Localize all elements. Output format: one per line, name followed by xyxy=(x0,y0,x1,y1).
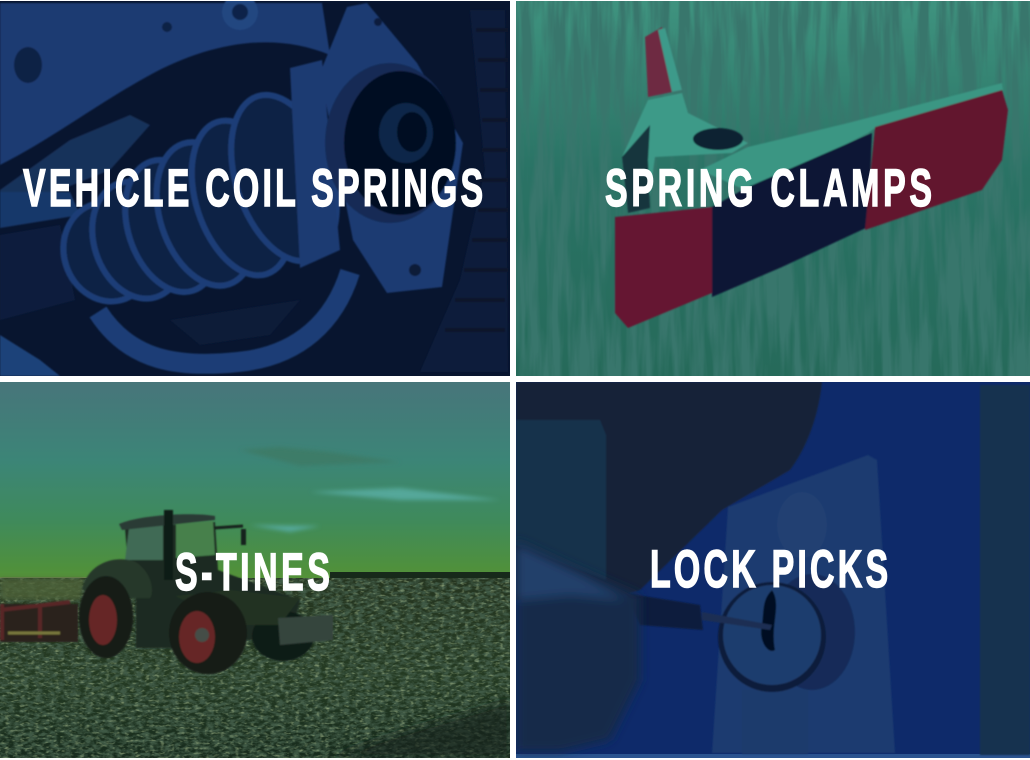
panel: spring clamps xyxy=(516,0,1030,376)
photo: field xyxy=(0,578,510,758)
photo: door and lock xyxy=(516,382,1030,755)
coil rings xyxy=(60,91,340,306)
panel: s-tines xyxy=(0,382,510,758)
wheel rim xyxy=(98,272,350,364)
heading: spring clamps: SPRING CLAMPS xyxy=(605,160,932,218)
tyre tread xyxy=(420,10,508,372)
heading: vehicle coil springs: VEHICLE COIL SPRINGS xyxy=(23,160,483,218)
photo: coil spring suspension xyxy=(0,0,508,376)
photo: clouds xyxy=(240,447,500,532)
heading: lock picks: LOCK PICKS xyxy=(650,541,888,599)
icon: tractor xyxy=(79,510,333,674)
icon: towed implement xyxy=(0,602,78,642)
photo: red spring clamp xyxy=(615,27,1008,328)
strut top plate xyxy=(320,3,463,293)
wood grain texture xyxy=(516,0,1030,376)
photo: hand xyxy=(516,540,640,752)
heading: s-tines: S-TINES xyxy=(175,544,330,602)
panel: lock picks xyxy=(516,382,1030,758)
panel: vehicle coil springs xyxy=(0,0,511,376)
